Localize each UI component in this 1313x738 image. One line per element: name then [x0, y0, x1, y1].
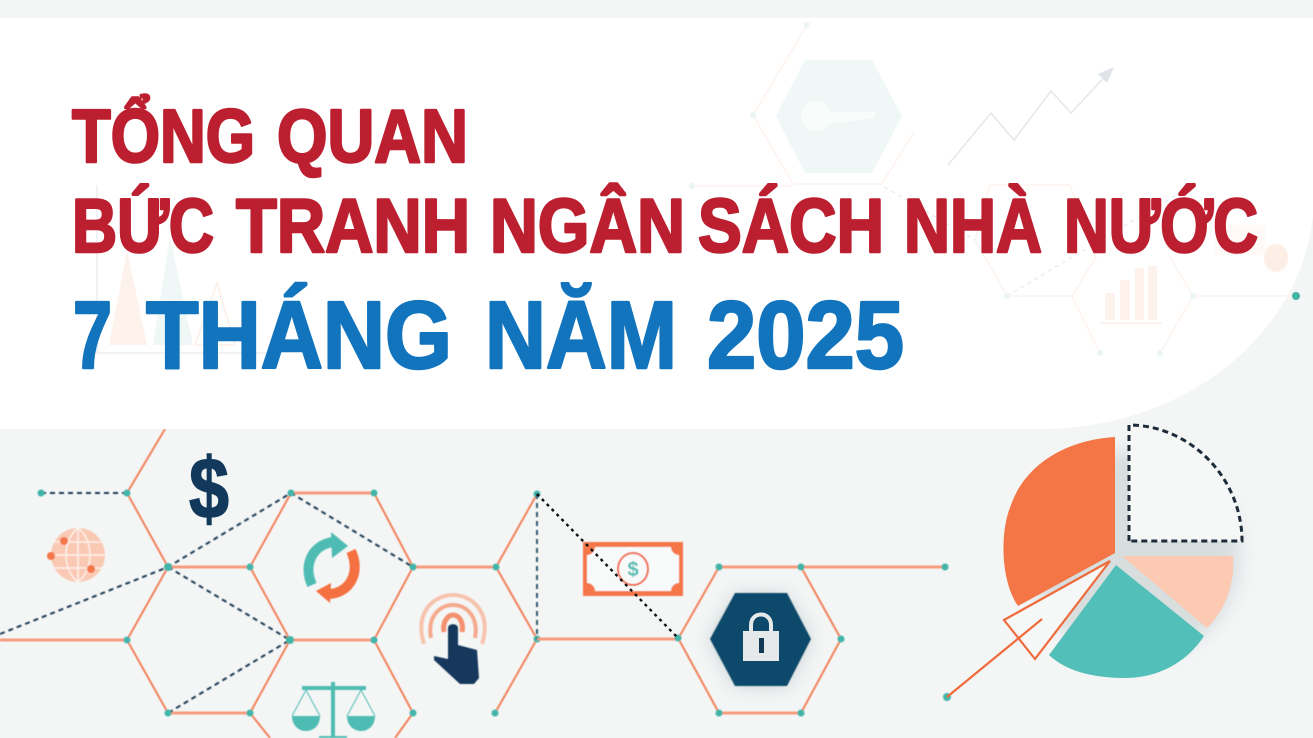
pie slice: peach	[1122, 556, 1233, 628]
title line 2: TRANH	[236, 184, 470, 269]
icon: refresh arrows	[309, 532, 355, 603]
pie slice: teal	[1049, 565, 1204, 678]
pie slice: orange	[1003, 437, 1115, 606]
title line 3: 2025	[707, 282, 904, 389]
icon: banknote: $	[627, 559, 639, 581]
title line 2	[72, 183, 1258, 269]
icon: globe	[47, 528, 105, 582]
icon: hand pointer with rings	[421, 595, 485, 684]
title line 2: NƯỚC	[1064, 184, 1258, 269]
title line 2: NGÂN	[490, 183, 685, 269]
chart: pie with exploded slices	[947, 425, 1242, 697]
icon: lock hexagon	[710, 593, 811, 686]
title line 1: TỔNG	[72, 94, 255, 178]
faded hexagon with key	[776, 60, 902, 173]
faded coin	[1215, 225, 1288, 272]
pie shadow	[1030, 450, 1240, 660]
faded trend arrow	[948, 67, 1114, 165]
panel: white header with rounded corner	[0, 18, 1313, 429]
title	[72, 94, 1258, 389]
pie slice: dashed outline	[1129, 425, 1242, 541]
title line 3: THÁNG	[146, 282, 452, 389]
title line 3: 7	[73, 282, 112, 389]
faded bar chart	[1100, 266, 1162, 324]
faded dashed lines	[884, 185, 1193, 296]
dashed line across banknote	[537, 494, 678, 638]
title line 3	[73, 282, 904, 389]
icon: scales	[292, 682, 375, 738]
faded background graphics in header	[97, 22, 1296, 356]
icon: dollar sign: $	[189, 441, 229, 537]
title line 1: QUAN	[277, 94, 468, 178]
network diagram: right hexagon	[537, 494, 951, 716]
teal node at header edge	[1292, 292, 1300, 300]
faded nodes	[689, 22, 1196, 356]
faded triangle chart	[97, 185, 266, 353]
title line 1	[72, 94, 468, 178]
title line 2: BỨC	[72, 184, 214, 269]
title line 2: SÁCH	[698, 184, 884, 269]
network diagram: left hexagons	[0, 429, 540, 738]
icon: banknote	[583, 542, 683, 596]
title line 2: NHÀ	[904, 184, 1042, 269]
faded hexagon lines	[692, 25, 1296, 353]
title line 3: NĂM	[485, 282, 677, 389]
arrow: paper plane pointer	[947, 561, 1110, 697]
